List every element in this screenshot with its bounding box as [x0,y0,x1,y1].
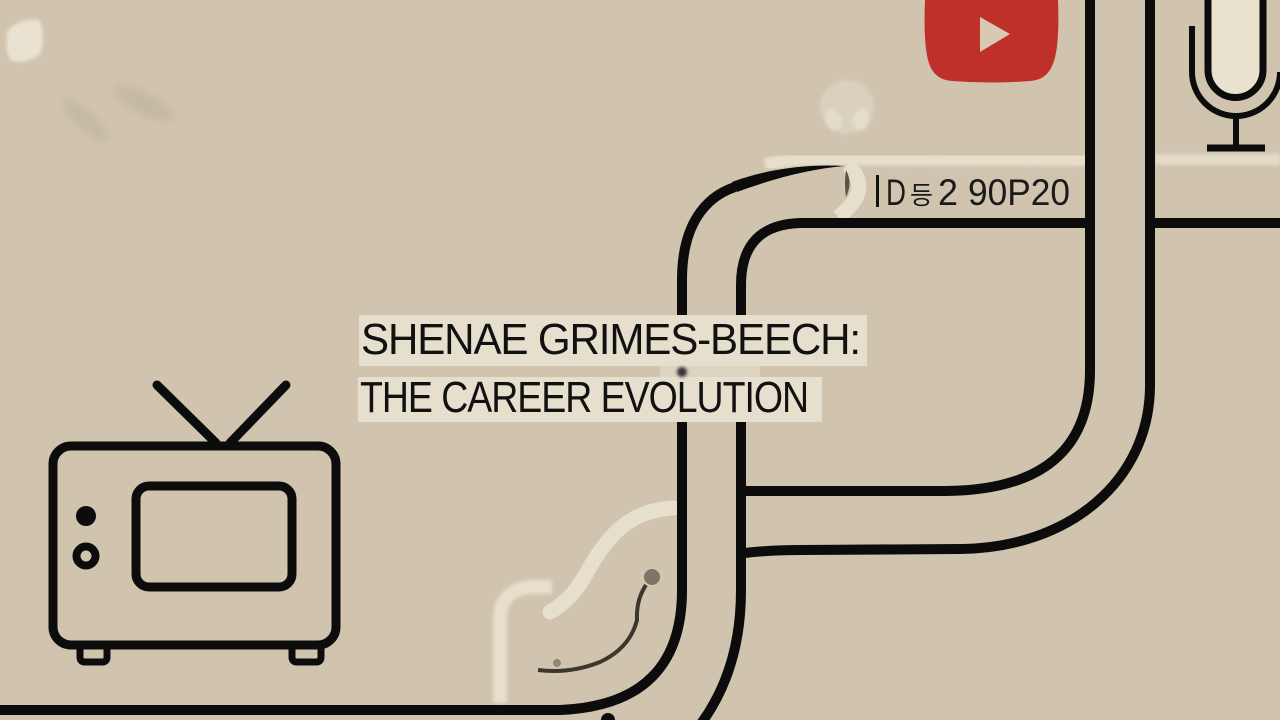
title: SHENAE GRIMES-BEECH: [361,315,860,364]
title: THE CAREER EVOLUTION [360,373,808,422]
chart code label: 90P20 [968,172,1070,213]
chart code label [876,172,1070,213]
pipe: vertical outer right track [745,0,1150,553]
pipe: inner left track [700,223,1088,720]
brush stroke with dots [538,569,660,720]
title [358,315,867,422]
icon: television [53,385,336,662]
pipe: vertical inner right track [745,0,1090,491]
small dark crescent mark [845,170,850,197]
pipe: tapered end of outer left track [732,166,845,192]
pipe: right horizontal branch [1150,218,1280,228]
pipe: outer left track [0,187,735,710]
faint headphone mark [820,80,874,134]
chart code label: 2 [938,172,958,213]
cream highlight strokes [500,154,1280,703]
faint decoration: top-left blob and leaves [6,20,177,146]
chart code label: 등 [910,182,933,210]
icon: YouTube play button [925,0,1058,82]
icon: microphone [1192,0,1280,148]
chart code label: D [886,172,906,213]
